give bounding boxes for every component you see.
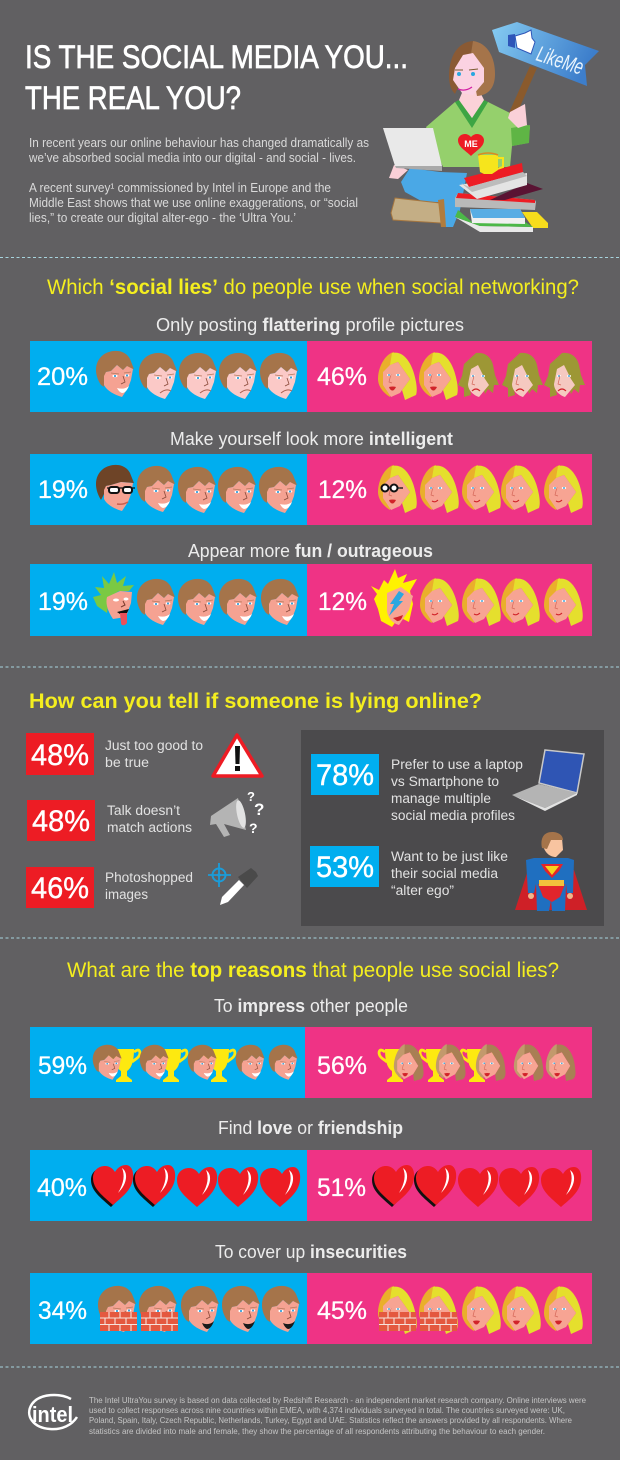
title: THE REAL YOU? [25,80,241,116]
stat: alter ego: Want to be just like [391,849,508,864]
stat: alter ego: 53% [316,851,374,884]
stat: talk vs actions: Talk doesn’t [107,803,180,818]
panel: fun men: 19% [38,588,88,616]
panel: fun men [30,564,307,636]
sign: Like Me: LikeMe [533,41,587,80]
icon: megaphone: ? [249,820,258,836]
title [25,39,408,116]
icon: warning triangle [213,735,262,776]
intro text: we’ve absorbed social media into our digital - and social - lives. [28,151,356,165]
stat: talk vs actions: match actions [107,820,192,835]
panel: impress men [30,1027,305,1098]
footnote: statistics are divided into male and female, they show the percentage of all respondents attributing the behaviour to each gender. [89,1426,545,1436]
panel: fun women: 12% [318,588,367,616]
sign: Like Me [492,22,599,86]
stat: laptop: social media profiles [391,808,515,823]
heading: social lies: Which ‘social lies’ do people use when social networking? [47,276,579,299]
stat: too good to be true: Just too good to [105,738,203,753]
illustration: woman with laptop, books and Like Me sign [383,22,599,232]
panel: love women: 51% [317,1174,366,1202]
stat: photoshopped: 46% [31,872,89,905]
subheading: intelligent: Make yourself look more intelligent [170,429,453,449]
panel: insecurities men: 34% [38,1297,87,1325]
panel: insecurities women [307,1273,592,1344]
stat: photoshopped: images [105,887,148,902]
heading: top reasons: What are the top reasons that people use social lies? [67,959,559,982]
stat: too good to be true: 48% [31,739,89,772]
face: green hair man [93,572,134,625]
stat: laptop: vs Smartphone to [391,774,499,789]
boot [391,198,446,227]
panel: intelligent men: 19% [38,476,88,504]
intro text [28,136,369,225]
panel: insecurities women: 45% [317,1297,367,1325]
panel: flattering men [30,341,307,412]
stat: talk vs actions: 48% [32,805,90,838]
panel: flattering women [307,341,592,412]
subheading: insecurities: To cover up insecurities [215,1242,407,1262]
panel: intelligent women: 12% [318,476,367,504]
subheading: flattering: Only posting flattering profile pictures [156,315,464,335]
divider [0,937,620,939]
icon: megaphone: ? [247,789,255,804]
footnote: Poland, Spain, Italy, Czech Republic, Netherlands, Turkey, Egypt and UAE. Statistics reflect the answers provided by all respondents. Where [89,1415,572,1425]
panel: impress men: 59% [38,1052,87,1080]
panel: love women [307,1150,592,1221]
divider [0,666,620,668]
panel: intelligent men [30,454,307,525]
panel: flattering women: 46% [317,363,367,391]
heart: ME [458,134,484,156]
intro text: lies,” to create our digital alter-ego - the ‘Ultra You.’ [29,211,296,225]
stat: too good to be true: be true [105,755,149,770]
panel: fun women [307,564,592,636]
icon: superhero [515,832,587,911]
intro text: Middle East shows that we use online exaggerations, or “social [29,196,358,210]
heart: ME: ME [464,139,478,149]
subheading: impress: To impress other people [214,996,408,1016]
stat: alter ego: their social media [391,866,499,881]
face: Bowie woman [371,569,417,627]
panel: love men [30,1150,307,1221]
stat: laptop [311,754,523,823]
panel: impress women: 56% [317,1052,367,1080]
mug [478,153,503,174]
icon: megaphone: ? [254,800,264,819]
title: IS THE SOCIAL MEDIA YOU... [25,39,408,75]
footnote: The Intel UltraYou survey is based on data collected by Redshift Research - an independent market research company. Online interviews were [89,1395,586,1405]
face: glasses man [96,465,135,511]
panel: insecurities men [30,1273,307,1344]
laptop [383,128,442,171]
intro text: In recent years our online behaviour has changed dramatically as [29,136,369,150]
divider [0,1366,620,1368]
logo: intel: intel [32,1402,73,1427]
subheading: love: Find love or friendship [218,1118,403,1138]
heading: lying online: How can you tell if someone is lying online? [29,690,482,713]
intro text: A recent survey¹ commissioned by Intel in Europe and the [29,181,331,195]
footnote [89,1395,586,1436]
icon: colour picker and target [208,863,258,905]
footnote: used to collect responses across nine countries within EMEA, with 4,374 individuals surveyed in total. The countries surveyed were: UK, [89,1405,565,1415]
panel: flattering men: 20% [37,363,88,391]
face: glasses woman [378,465,417,513]
logo: intel [29,1395,77,1429]
subheading: fun: Appear more fun / outrageous [188,541,433,561]
panel: laptop and alter ego [301,730,604,926]
stat: photoshopped [26,867,193,908]
stat: laptop: manage multiple [391,791,491,806]
stat: photoshopped: Photoshopped [105,870,193,885]
icon: laptop [512,750,584,811]
stat: laptop: Prefer to use a laptop [391,757,523,772]
panel: impress women [305,1027,592,1098]
stat: talk vs actions [27,800,192,841]
books [455,163,548,232]
stat: too good to be true [26,733,203,775]
divider [0,256,620,258]
icon: megaphone [210,789,264,837]
stat: laptop: 78% [316,759,374,792]
stat: alter ego: “alter ego” [391,883,454,898]
panel: intelligent women [307,454,592,525]
stat: alter ego [310,846,508,898]
panel: love men: 40% [37,1174,87,1202]
